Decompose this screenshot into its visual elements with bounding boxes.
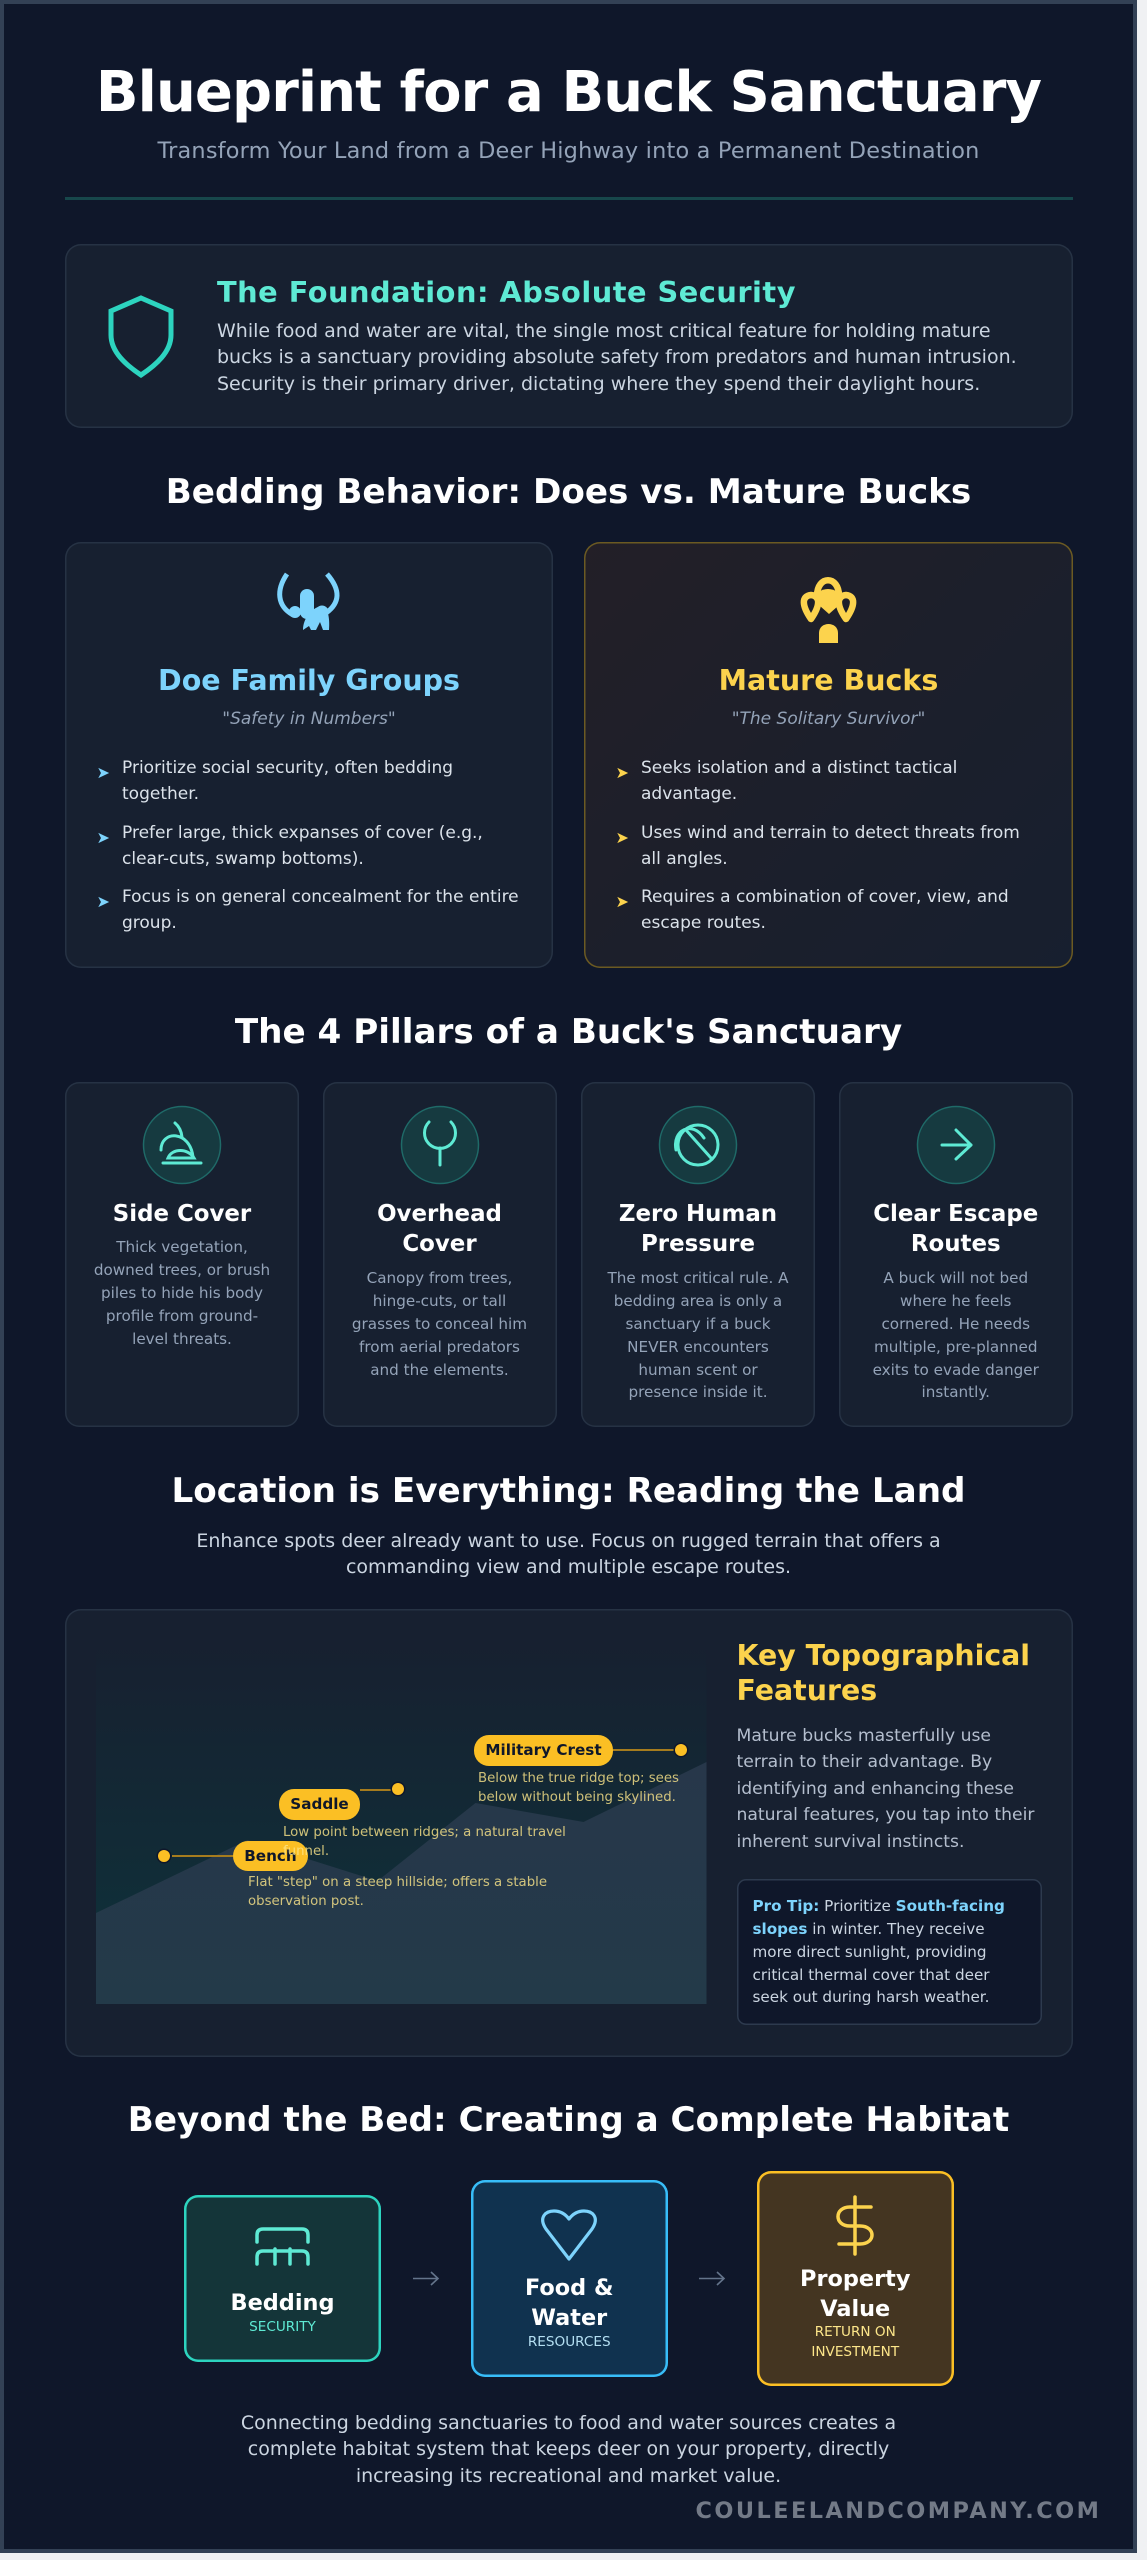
zero human pressure text: sanctuary if a buck xyxy=(625,1315,771,1333)
pro tip box: more direct sunlight, providing xyxy=(752,1943,987,1961)
doe point 2: clear-cuts, swamp bottoms). xyxy=(122,849,364,869)
buck point 1: Seeks isolation and a distinct tactical xyxy=(641,758,957,778)
doe quote: "Safety in Numbers" xyxy=(222,708,396,728)
icon: side cover xyxy=(142,1106,222,1184)
overhead cover title: Cover xyxy=(402,1231,477,1257)
icon: doe group xyxy=(277,572,340,630)
topography heading xyxy=(736,1639,1030,1706)
buck point 1 xyxy=(616,758,957,804)
buck point 2 xyxy=(616,823,1020,869)
overhead cover text: hinge-cuts, or tall xyxy=(373,1292,506,1310)
bedding title: Bedding xyxy=(231,2290,334,2316)
location intro text: commanding view and multiple escape routes. xyxy=(346,1556,791,1578)
clear escape routes text: A buck will not bed xyxy=(883,1269,1028,1287)
zero human pressure text: bedding area is only a xyxy=(614,1292,782,1310)
foundation text: Security is their primary driver, dictating where they spend their daylight hours. xyxy=(217,373,980,395)
zero human pressure text: human scent or xyxy=(638,1361,758,1379)
side cover title: Side Cover xyxy=(113,1201,251,1227)
pro tip box: seek out during harsh weather. xyxy=(752,1988,989,2006)
clear escape routes title: Routes xyxy=(911,1231,1001,1257)
arrow: food to property value xyxy=(699,2272,725,2286)
overhead cover title xyxy=(377,1201,502,1257)
side cover text xyxy=(94,1238,270,1348)
clear escape routes title xyxy=(873,1201,1038,1257)
flow box: property value xyxy=(757,2171,954,2386)
foundation text: While food and water are vital, the single most critical feature for holding mature xyxy=(217,320,991,342)
panel: doe family groups xyxy=(65,542,553,968)
topography text xyxy=(736,1726,1034,1852)
doe point 1: ➤ xyxy=(96,763,110,782)
clear escape routes text: cornered. He needs xyxy=(881,1315,1030,1333)
panel: overhead cover xyxy=(322,1082,556,1427)
topography heading: Features xyxy=(736,1674,877,1706)
doe point 3: Focus is on general concealment for the entire xyxy=(122,887,519,907)
title: Blueprint for a Buck Sanctuary xyxy=(96,60,1041,125)
buck point 2: all angles. xyxy=(641,849,728,869)
clear escape routes text: instantly. xyxy=(922,1383,990,1401)
callout: military crest xyxy=(474,1735,688,1805)
buck point 2: Uses wind and terrain to detect threats from xyxy=(641,823,1020,843)
location intro text: Enhance spots deer already want to use. Focus on rugged terrain that offers a xyxy=(196,1530,941,1552)
foundation text xyxy=(217,320,1017,395)
doe point 3: ➤ xyxy=(96,892,110,911)
icon: dollar sign xyxy=(836,2195,874,2256)
overhead cover text xyxy=(352,1269,527,1379)
overhead cover title: Overhead xyxy=(377,1201,502,1227)
panel: mature bucks xyxy=(584,542,1073,968)
panel: topography xyxy=(65,1609,1073,2057)
heading: 4 pillars: The 4 Pillars of a Buck's Sanctuary xyxy=(235,1012,902,1052)
zero human pressure title: Zero Human xyxy=(619,1201,777,1227)
overhead cover text: and the elements. xyxy=(370,1361,509,1379)
flow box: food and water xyxy=(471,2180,668,2377)
pro tip box: critical thermal cover that deer xyxy=(752,1966,990,1984)
icon: heart xyxy=(541,2209,597,2261)
food and water title: Food & xyxy=(525,2274,614,2300)
buck point 1: advantage. xyxy=(641,784,737,804)
foundation text: bucks is a sanctuary providing absolute safety from predators and human intrusion. xyxy=(217,346,1017,368)
overhead cover text: grasses to conceal him xyxy=(352,1315,527,1333)
buck point 3: escape routes. xyxy=(641,913,766,933)
doe heading: Doe Family Groups xyxy=(158,664,460,697)
topography heading: Key Topographical xyxy=(736,1639,1030,1672)
icon: zero human pressure xyxy=(658,1106,738,1184)
closing text: complete habitat system that keeps deer on your property, directly xyxy=(248,2438,889,2460)
doe point 3: group. xyxy=(122,913,177,933)
property value title: Value xyxy=(820,2296,890,2322)
brand watermark: COULEELANDCOMPANY.COM xyxy=(696,2498,1101,2524)
callout: saddle xyxy=(279,1782,566,1859)
header divider xyxy=(65,197,1073,200)
zero human pressure text xyxy=(607,1269,789,1401)
callout: bench xyxy=(156,1841,547,1909)
buck point 3: Requires a combination of cover, view, and xyxy=(641,887,1009,907)
doe point 1: together. xyxy=(122,784,199,804)
side cover text: level threats. xyxy=(132,1330,232,1348)
panel: side cover xyxy=(65,1082,299,1427)
closing text: Connecting bedding sanctuaries to food and water sources creates a xyxy=(241,2412,896,2434)
buck point 3 xyxy=(616,887,1009,933)
doe point 1 xyxy=(96,758,453,804)
terrain diagram xyxy=(96,1762,706,2004)
callout: military crest: Military Crest xyxy=(485,1741,602,1759)
buck point 1: ➤ xyxy=(616,763,629,782)
doe point 2: ➤ xyxy=(96,828,110,847)
food and water title: Water xyxy=(531,2304,607,2330)
clear escape routes text xyxy=(873,1269,1039,1401)
doe point 1: Prioritize social security, often bedding xyxy=(122,758,453,778)
zero human pressure title: Pressure xyxy=(641,1231,755,1257)
zero human pressure text: The most critical rule. A xyxy=(607,1269,789,1287)
callout: saddle: Low point between ridges; a natural travel xyxy=(283,1825,566,1840)
heading: location: Location is Everything: Reading the Land xyxy=(171,1471,966,1511)
icon: shield xyxy=(108,295,174,378)
topography text: identifying and enhancing these xyxy=(736,1779,1014,1799)
buck point 3: ➤ xyxy=(616,892,629,911)
buck point 2: ➤ xyxy=(616,828,629,847)
property value subtitle: INVESTMENT xyxy=(811,2344,899,2360)
callout: saddle: funnel. xyxy=(283,1844,329,1859)
callout: military crest: below without being skylined. xyxy=(478,1790,676,1805)
topography text: inherent survival instincts. xyxy=(736,1832,964,1852)
side cover text: downed trees, or brush xyxy=(94,1261,270,1279)
foundation heading: The Foundation: Absolute Security xyxy=(217,274,796,308)
topography text: Mature bucks masterfully use xyxy=(736,1726,991,1746)
doe point 3 xyxy=(96,887,519,933)
topography text: natural features, you tap into their xyxy=(736,1805,1034,1825)
overhead cover text: Canopy from trees, xyxy=(367,1269,512,1287)
closing text: increasing its recreational and market value. xyxy=(356,2465,781,2487)
mature bucks heading: Mature Bucks xyxy=(719,664,938,697)
clear escape routes text: where he feels xyxy=(900,1292,1011,1310)
callout: bench: Flat "step" on a steep hillside; offers a stable xyxy=(248,1875,547,1890)
subtitle: Transform Your Land from a Deer Highway into a Permanent Destination xyxy=(158,138,979,164)
icon: overhead cover xyxy=(400,1106,480,1184)
callout: bench: observation post. xyxy=(248,1894,364,1909)
pro tip box xyxy=(736,1879,1042,2025)
panel: foundation xyxy=(65,244,1073,428)
pro tip box: Pro Tip: Prioritize South-facing xyxy=(752,1897,1005,1915)
heading: beyond the bed: Beyond the Bed: Creating a Complete Habitat xyxy=(128,2100,1009,2140)
side cover text: profile from ground- xyxy=(106,1307,258,1325)
clear escape routes title: Clear Escape xyxy=(873,1201,1038,1227)
pro tip box: slopes in winter. They receive xyxy=(752,1920,985,1938)
closing text xyxy=(241,2412,896,2487)
bedding subtitle: SECURITY xyxy=(249,2319,316,2335)
zero human pressure text: presence inside it. xyxy=(628,1383,768,1401)
zero human pressure text: NEVER encounters xyxy=(627,1338,769,1356)
clear escape routes text: multiple, pre-planned xyxy=(874,1338,1037,1356)
callout: saddle: Saddle xyxy=(290,1795,349,1813)
panel: zero human pressure xyxy=(581,1082,815,1427)
food and water title xyxy=(525,2274,614,2330)
doe point 2: Prefer large, thick expanses of cover (e.g., xyxy=(122,823,483,843)
clear escape routes text: exits to evade danger xyxy=(873,1361,1039,1379)
property value title: Property xyxy=(800,2266,910,2292)
property value title xyxy=(800,2266,910,2322)
zero human pressure title xyxy=(619,1201,777,1257)
side cover text: piles to hide his body xyxy=(101,1284,263,1302)
arrow: bedding to food xyxy=(413,2272,439,2286)
callout: military crest: Below the true ridge top; sees xyxy=(478,1771,679,1786)
doe point 2 xyxy=(96,823,483,869)
mature bucks quote: "The Solitary Survivor" xyxy=(732,708,925,728)
heading: bedding behavior: Bedding Behavior: Does vs. Mature Bucks xyxy=(166,472,971,512)
flow box: bedding xyxy=(184,2195,381,2362)
icon: escape arrow xyxy=(916,1106,996,1184)
location intro text xyxy=(196,1530,941,1578)
icon: bed xyxy=(255,2227,310,2266)
side cover text: Thick vegetation, xyxy=(116,1238,248,1256)
icon: mature buck xyxy=(800,577,856,643)
overhead cover text: from aerial predators xyxy=(359,1338,520,1356)
property value subtitle: RETURN ON xyxy=(815,2324,896,2340)
food and water subtitle: RESOURCES xyxy=(528,2334,611,2350)
property value subtitle xyxy=(811,2324,900,2360)
panel: clear escape routes xyxy=(838,1082,1073,1427)
callout: bench: Bench xyxy=(244,1847,297,1865)
topography text: terrain to their advantage. By xyxy=(736,1752,992,1772)
